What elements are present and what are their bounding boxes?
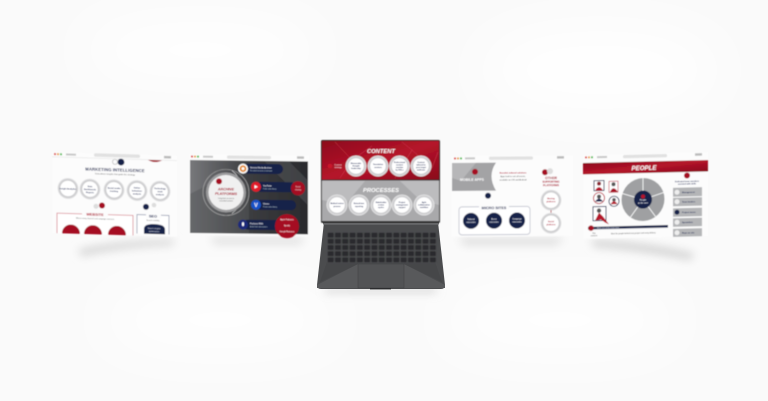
panel: people [583,152,708,239]
micro sites box: microsites [512,220,522,224]
website box: WEBSITE [86,213,104,217]
team list rows: Project teams [682,211,697,214]
seo box: Search visibility [146,219,160,222]
seo box: SEO [149,214,157,219]
service circles: Dashboards [84,189,97,191]
seo box: Search engine [148,228,161,230]
other supporting platforms: SUPPORTING [542,180,560,184]
service circles: behaviour [132,190,142,193]
seo box [137,202,169,235]
content section: Content [417,161,425,164]
content section: leadership [351,168,362,170]
content section [322,141,439,180]
archive platforms circle: PLATFORMS [215,192,238,196]
team list rows [673,187,702,237]
panel: archive platforms [189,154,309,238]
project note: contacts [591,234,597,237]
processes section: management [396,204,408,206]
list item: podcast: Podcast RSS [250,222,264,225]
processes section [322,180,439,221]
team list rows: Specialists [682,221,694,224]
team list rows: Management [682,191,695,194]
wheel diagram: People [640,199,647,202]
other supporting platforms: platforms [546,200,556,203]
list item: podcast [238,220,285,230]
micro sites box: Event [491,218,497,221]
processes section: Project [399,201,406,204]
content section: services [374,167,382,169]
archive platforms circle: recorded content [219,199,233,203]
laptop screen [321,140,440,223]
list item: podcast: Audio feed subscriptions [250,225,268,228]
content section: strategy [334,166,343,169]
micro sites box: Tailored [467,219,475,221]
service circles: Technology [154,188,167,190]
red callout: video [291,181,305,195]
team list heading: Dedicated team members [675,180,700,183]
content section: Content [334,164,342,166]
list item: stream: Recorded sessions on demand [250,170,272,172]
content section: your target [416,166,426,169]
list item: youtube [251,182,296,192]
wheel diagram [622,178,664,222]
content section: CONTENT [367,149,395,155]
team list heading: assisted with skills [678,182,697,186]
service circles: Insight Analytics [60,187,77,191]
service circles: Online [134,187,141,190]
red callout: audio: Spotify [284,224,290,227]
other supporting platforms: PLATFORMS [543,183,559,187]
other supporting platforms: Meeting [547,197,556,200]
mobile apps description: available on iOS and Android [499,178,527,182]
browser toolbar [52,152,177,163]
red callout: video: Social [296,186,301,188]
micro sites box [459,203,530,235]
service circles: Social media [108,188,121,190]
content section: tailored to [416,164,426,166]
processes section: Medical review [330,203,344,205]
laptop base [317,222,445,289]
service circles [58,178,170,202]
project note: Meet the people behind every project and every delivery [611,231,656,235]
archive platforms circle: ARCHIVE [217,187,235,192]
processes section: PROCESSES [363,188,399,194]
micro sites box: microsites [489,221,499,224]
micro sites box: Campaign [512,218,522,221]
content section: audience [417,170,425,172]
hinge [323,222,439,224]
project note: Key [592,233,596,235]
content section: by KOLs [396,170,403,172]
team photos [593,180,619,225]
browser toolbar [585,153,702,159]
other supporting platforms: Social [548,221,554,223]
dark photo background [190,160,308,234]
team list rows: Team leaders [682,201,696,204]
icon: micro sites badge [485,193,491,199]
trackpad [358,264,404,288]
processes section: process [333,206,341,208]
content section: Measurable [351,163,361,165]
people banner: PEOPLE [631,165,657,172]
laptop [317,140,445,289]
title: MARKETING INTELLIGENCE [85,166,145,173]
content section: content [396,164,403,166]
list item: vimeo [251,200,296,210]
processes section: cycles [378,207,384,209]
connector arc [232,171,241,214]
seo box: optimisation [149,230,159,233]
processes section: workflow [420,207,429,209]
red callout: video: sharing [295,189,301,191]
service circles: stack [157,190,164,193]
list item: vimeo: V [254,203,258,209]
team list heading [675,172,700,186]
processes section: review [378,204,384,206]
archive platforms circle: Long-term access to [218,197,234,200]
service circles: Data [88,185,93,188]
processes section: Agile [422,201,426,204]
mobile apps description: Apps built to suit all events, [500,175,526,178]
mobile apps description [499,171,527,182]
team list rows: Reps on site [682,231,695,235]
content section: Professional [394,162,406,164]
front notch [370,288,391,289]
floor shadows [78,238,695,292]
list item: youtube: Public video library [263,188,277,191]
processes section: support [398,206,406,209]
website box [57,201,133,235]
browser toolbar [454,156,564,160]
mobile apps hero: MOBILE APPS [460,178,485,182]
content section: thought [352,164,360,168]
processes section: reporting [355,205,364,208]
processes section: Stakeholder [376,201,387,204]
project bar: Meet one of the team here [597,226,619,230]
archive platforms circle [203,169,249,216]
list item: stream [238,164,283,174]
service circles: Reports [86,191,95,194]
processes section: collaborative [418,204,430,206]
project note [591,231,656,237]
micro sites box: MICRO SITES [482,206,507,210]
other supporting platforms [540,168,562,234]
list item: vimeo: Private video library [263,205,277,209]
icon: numbered badge [112,158,124,166]
processes section: Data-driven [354,202,365,205]
browser toolbar [191,155,304,160]
panel: marketing intelligence [52,152,177,237]
content section: creation [396,166,404,169]
content section: Translation [373,163,384,166]
red callout: audio: Google Podcasts [280,230,294,233]
other supporting platforms: platforms [546,223,556,226]
list item: youtube: YouTube [263,185,272,188]
service circles: analysis [156,194,165,196]
list item: stream: Stream Media Archive [250,166,273,170]
other supporting platforms: OTHER [545,176,557,180]
service circles: tracking [110,190,119,193]
red callout: audio [275,214,299,238]
wheel diagram: at the core [638,201,649,205]
website box: Where every channel and campaign connects [76,217,114,221]
list item: vimeo: Vimeo [263,203,270,205]
subtitle: Data-driven insights that guide the strategy [95,172,136,177]
red callout: audio: Apple Podcasts [280,218,294,221]
service circles: analysis [133,193,142,196]
keyboard [327,232,437,263]
panel: mobile apps and micro sites [451,155,573,237]
mobile apps description: Eventful, tailored solutions [500,171,527,175]
micro sites box: microsites [466,221,476,224]
